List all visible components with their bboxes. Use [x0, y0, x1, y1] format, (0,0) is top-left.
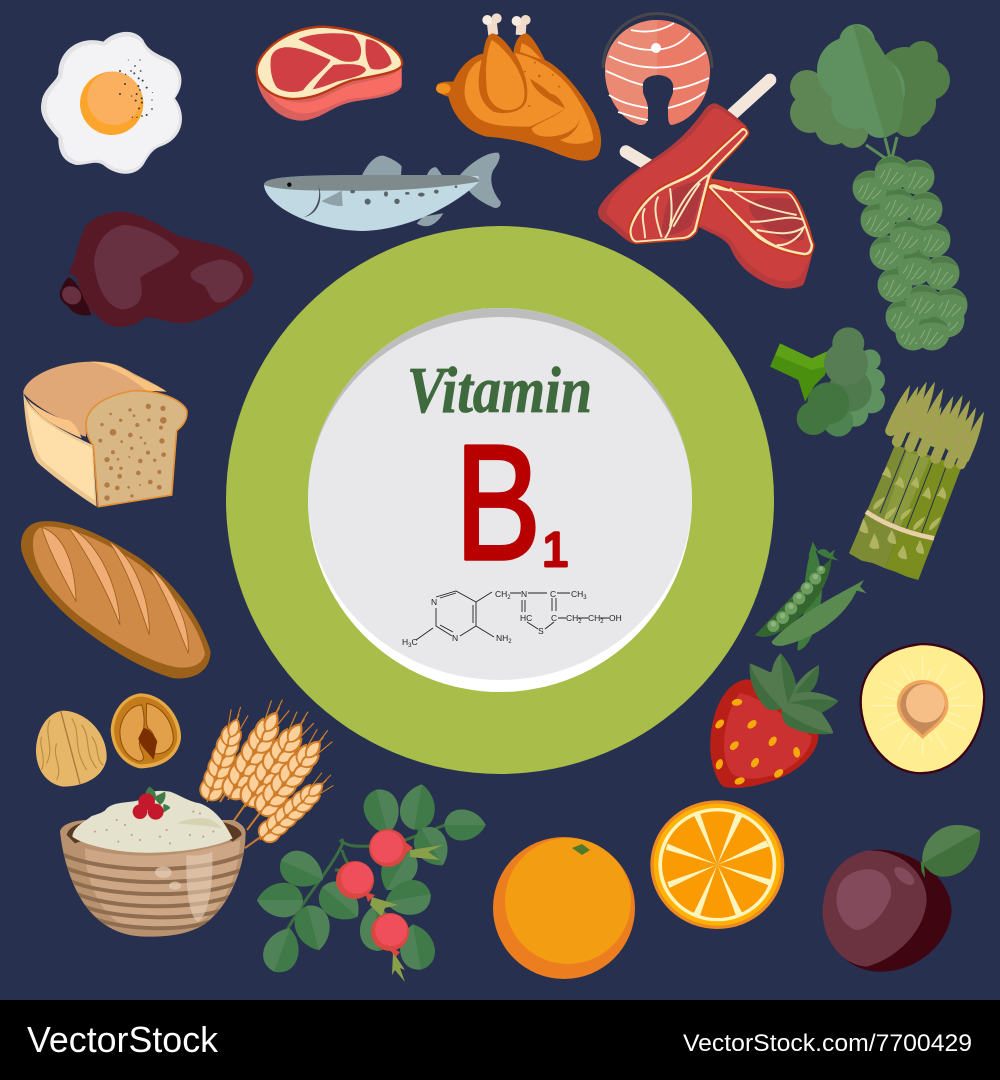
- chemical formula: CH: [566, 613, 578, 623]
- footer logo text: VectorStock: [27, 1019, 219, 1060]
- icon: wheat: [192, 691, 342, 852]
- chemical formula: 2: [600, 619, 604, 625]
- icon: salmon steak: [603, 14, 712, 125]
- icon: rose hips: [257, 781, 486, 982]
- icon: asparagus: [849, 380, 989, 580]
- icon: orange slice: [650, 800, 784, 929]
- heading: B1: 1: [542, 524, 569, 577]
- chemical formula: 3: [583, 595, 587, 601]
- icon: peas: [755, 542, 867, 651]
- icon: walnuts: [36, 693, 181, 787]
- icon: bread loaf: [23, 362, 187, 507]
- icon: roast chicken: [436, 13, 601, 161]
- chemical formula: 2: [578, 619, 582, 625]
- chemical formula: C: [551, 613, 557, 623]
- chemical formula: OH: [609, 613, 622, 623]
- icon: fish: [264, 153, 501, 231]
- chemical formula: 2: [508, 639, 512, 645]
- footer band: [0, 1000, 1000, 1080]
- icon: plum: [823, 825, 980, 972]
- icon: beef steak: [256, 27, 402, 121]
- chemical formula: HC: [520, 613, 532, 623]
- icon: strawberry: [710, 653, 838, 788]
- chemical formula: N: [521, 589, 527, 599]
- icon: fried egg: [41, 32, 182, 174]
- chemical formula: N: [431, 597, 437, 607]
- icon: broccoli: [770, 327, 885, 437]
- chemical formula: N: [452, 633, 458, 643]
- chemical formula: 3: [408, 643, 412, 649]
- footer url text: VectorStock.com/7700429: [683, 1030, 972, 1057]
- chemical formula: S: [538, 626, 544, 636]
- chemical formula: C: [411, 637, 418, 647]
- chemical formula: C: [550, 589, 556, 599]
- icon: porridge bowl: [57, 787, 250, 937]
- chemical formula: H: [402, 637, 408, 647]
- icon: beef liver: [58, 212, 254, 327]
- chemical formula: CH: [571, 589, 583, 599]
- chemical formula: NH: [496, 633, 508, 643]
- plate: [226, 226, 774, 774]
- icon: orange: [493, 837, 635, 979]
- icon: lamb chops: [598, 80, 814, 289]
- chemical formula: 2: [507, 595, 511, 601]
- icon: peach half: [861, 644, 984, 773]
- chemical formula: CH: [588, 613, 600, 623]
- icon: brussels sprouts plant: [790, 24, 968, 350]
- title: Vitamin: Vitamin: [407, 354, 592, 427]
- heading: B1: B: [455, 411, 541, 594]
- chemical formula: CH: [495, 589, 507, 599]
- icon: baguette: [21, 521, 211, 678]
- chemical formula: [402, 589, 622, 649]
